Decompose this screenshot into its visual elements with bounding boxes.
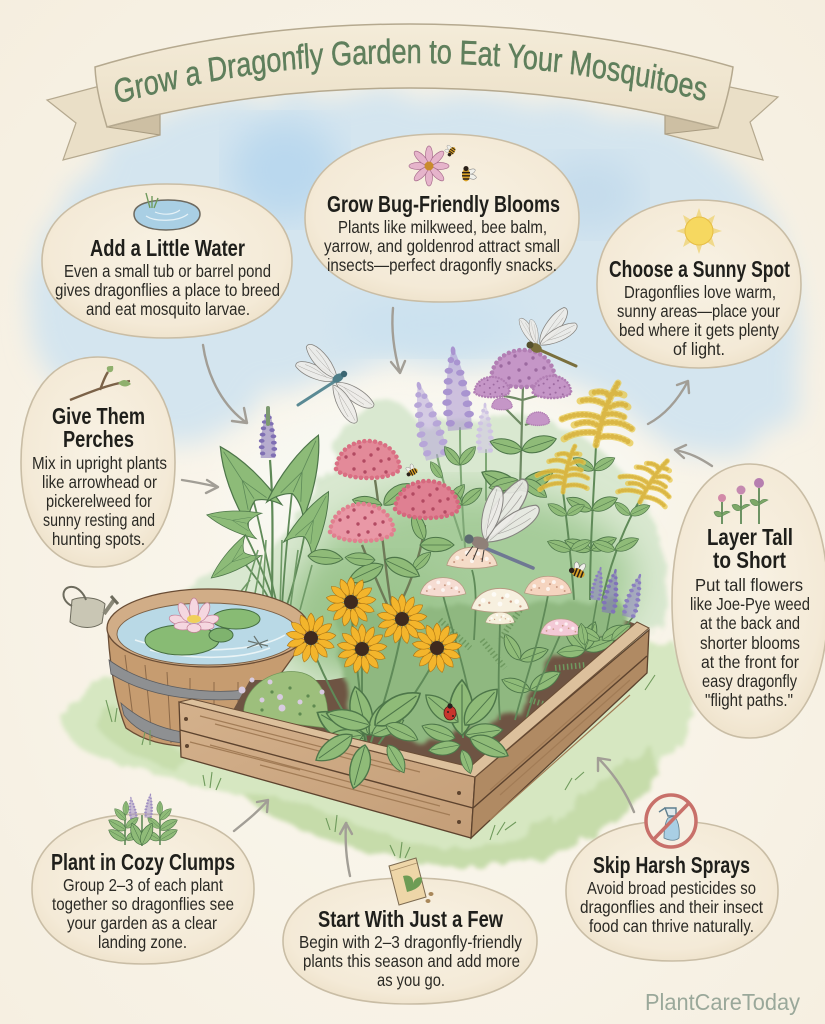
body text: "flight paths."	[705, 690, 793, 710]
body text: your garden as a clear	[67, 913, 217, 933]
panel: grow bug-friendly blooms	[305, 134, 579, 302]
heading	[707, 524, 793, 573]
body text: together so dragonflies see	[52, 894, 234, 914]
body text	[55, 261, 280, 319]
body text: like arrowhead or	[42, 472, 157, 492]
yarrow	[420, 547, 581, 725]
body text: Put tall flowers	[695, 575, 803, 595]
body text	[580, 878, 763, 936]
heading: Start With Just a Few	[318, 906, 503, 932]
icon: seed packet	[389, 858, 434, 905]
panel: give them perches	[21, 357, 175, 567]
milkweed	[330, 441, 459, 615]
body text	[324, 217, 560, 275]
joe-pye weed	[474, 350, 571, 502]
heading	[52, 403, 145, 452]
grass tufts	[106, 675, 655, 858]
body text: shorter blooms	[700, 633, 800, 653]
black-eyed susans	[286, 577, 462, 674]
heading: to Short	[713, 547, 786, 573]
body text: at the front for	[701, 652, 799, 672]
panel: add a little water	[42, 184, 292, 338]
pickerelweed and arrowhead	[203, 408, 344, 610]
arrow: start to bed	[340, 823, 352, 876]
heading: Add a Little Water	[90, 235, 245, 261]
body text: Mix in upright plants	[32, 453, 167, 473]
bumblebee: near lavender	[568, 559, 589, 579]
goldenrod	[535, 383, 677, 610]
banner right tail	[665, 86, 778, 160]
watermark: PlantCareToday	[645, 989, 800, 1015]
body text: yarrow, and goldenrod attract small	[324, 236, 560, 256]
body text: sunny areas—place your	[617, 301, 780, 321]
body text	[617, 282, 780, 359]
body text: food can thrive naturally.	[589, 916, 754, 936]
bed foliage mass	[335, 600, 630, 745]
body text: Plants like milkweed, bee balm,	[338, 217, 547, 237]
dragonfly: blue	[294, 340, 377, 427]
arrows	[182, 308, 712, 876]
arrow: water to plants	[203, 345, 247, 423]
icon: pond	[134, 193, 200, 230]
body text: Dragonflies love warm,	[624, 282, 776, 302]
heading: Skip Harsh Sprays	[593, 852, 750, 878]
panel: start with just a few	[283, 858, 537, 1004]
background foliage	[182, 399, 664, 690]
icon: sun	[676, 208, 722, 254]
icon: twig	[70, 366, 131, 400]
body text: insects—perfect dragonfly snacks.	[327, 255, 557, 275]
icon: watering can	[64, 587, 118, 627]
arrow: perches to pickerelweed	[182, 480, 218, 493]
body text: of light.	[673, 339, 725, 359]
title: Grow a Dragonfly Garden to Eat Your Mosquitoes	[114, 38, 706, 102]
small lavender	[576, 566, 648, 646]
barrel pond	[107, 589, 309, 747]
body text	[32, 453, 167, 549]
body text: bed where it gets plenty	[619, 320, 779, 340]
body text: dragonflies and their insect	[580, 897, 763, 917]
heading: Grow Bug-Friendly Blooms	[327, 191, 560, 217]
body text: sunny resting and	[43, 510, 155, 530]
front leaves	[311, 680, 512, 791]
icon: flower and bees	[409, 143, 477, 186]
arrow: layer to plants	[675, 445, 712, 466]
body text	[299, 932, 522, 990]
raised bed soil	[232, 608, 636, 768]
body text: at the back and	[700, 613, 800, 633]
heading: Plant in Cozy Clumps	[51, 849, 235, 875]
body text: easy dragonfly	[702, 671, 797, 691]
icon: plant clump	[106, 793, 179, 847]
body text: pickerelweed for	[46, 491, 152, 511]
watercolor sky wash	[30, 94, 801, 585]
dragonfly: olive	[517, 305, 580, 366]
heading: Give Them	[52, 403, 145, 429]
body text: landing zone.	[98, 932, 187, 952]
heading: Layer Tall	[707, 524, 793, 550]
body text	[690, 575, 810, 710]
panel: choose a sunny spot	[597, 200, 801, 368]
body text: plants this season and add more	[303, 951, 520, 971]
body text: Avoid broad pesticides so	[587, 878, 756, 898]
panel: plant in cozy clumps	[32, 793, 254, 964]
grass wash	[62, 640, 691, 867]
raised bed walls	[179, 622, 649, 838]
body text: as you go.	[377, 970, 445, 990]
body text: hunting spots.	[52, 529, 145, 549]
banner left tail	[47, 86, 160, 160]
title banner	[46, 23, 780, 161]
bumblebee: near milkweed	[403, 462, 419, 478]
body text: gives dragonflies a place to breed	[55, 280, 280, 300]
heading: Perches	[63, 426, 134, 452]
arrow: sun to goldenrod	[648, 381, 689, 424]
body text: and eat mosquito larvae.	[86, 299, 250, 319]
body text: Begin with 2–3 dragonfly-friendly	[299, 932, 522, 952]
arrow: sprays to bed	[598, 758, 634, 812]
banner main ribbon	[95, 24, 733, 128]
banner folds	[107, 112, 718, 135]
panel: layer tall to short	[672, 464, 825, 738]
body text: Group 2–3 of each plant	[63, 875, 223, 895]
rudbeckia foliage	[311, 610, 437, 751]
thyme mound	[238, 672, 328, 728]
body text	[52, 875, 234, 952]
icon: layered plants	[714, 478, 768, 524]
tall liatris spikes	[404, 345, 494, 560]
body text: Even a small tub or barrel pond	[64, 261, 271, 281]
icon: no spray	[646, 795, 696, 847]
arrow: clumps to bed	[234, 800, 268, 831]
dragonfly: large	[464, 475, 544, 568]
panel: skip harsh sprays	[566, 795, 778, 961]
arrow: blooms to flowers	[391, 308, 405, 373]
